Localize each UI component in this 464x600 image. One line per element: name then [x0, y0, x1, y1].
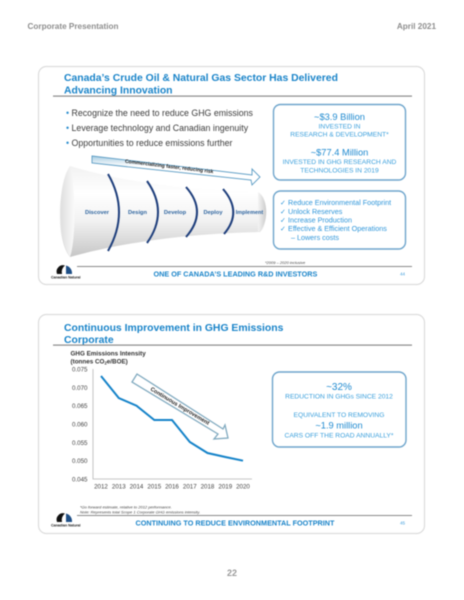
line chart: GHG emissions intensity: 2 — [104, 360, 107, 366]
callout: benefits checklist: ✓ Unlock Reserves — [280, 207, 343, 216]
arrow: continuous improvement — [132, 374, 228, 439]
funnel diagram: Design — [128, 210, 148, 216]
callout: investment figures: RESEARCH & DEVELOPMENT* — [290, 132, 389, 138]
panel: emissions slide — [38, 314, 424, 534]
page header: Corporate Presentation — [28, 22, 118, 31]
heading: emissions: Continuous Improvement in GHG Emissions — [64, 323, 284, 334]
line chart: GHG emissions intensity: 0.075 — [72, 366, 88, 374]
line chart: GHG emissions intensity: 2012 — [94, 484, 108, 490]
line chart: GHG emissions intensity — [70, 350, 252, 490]
bullet list: • Recognize the need to reduce GHG emissions — [66, 108, 254, 118]
bullet list — [66, 108, 254, 148]
callout: benefits checklist — [274, 191, 406, 249]
footnote: *2009 – 2020 inclusive — [265, 260, 306, 265]
funnel diagram: Discover — [85, 210, 110, 216]
line chart: GHG emissions intensity: 2014 — [130, 484, 144, 490]
logo: Canadian Natural — [51, 265, 81, 280]
logo: Canadian Natural: Canadian Natural — [51, 276, 81, 280]
page header — [28, 22, 436, 31]
line chart: GHG emissions intensity: (tonnes CO — [70, 358, 104, 366]
heading: innovation — [53, 73, 412, 97]
line chart: GHG emissions intensity: e/BOE) — [107, 358, 128, 366]
heading: emissions: Corporate — [64, 335, 114, 346]
callout: reduction figures — [272, 372, 406, 447]
callout: reduction figures: CARS OFF THE ROAD ANNUALLY* — [284, 432, 394, 440]
footer: emissions slide: 45 — [400, 520, 406, 526]
bullet list: • Opportunities to reduce emissions further — [66, 138, 232, 148]
panel: innovation slide — [38, 66, 424, 284]
page number: 22 — [227, 568, 237, 578]
heading: emissions — [53, 323, 412, 346]
heading: innovation: Canada’s Crude Oil & Natural Gas Sector Has Delivered — [64, 73, 338, 84]
footer: emissions slide — [77, 515, 412, 528]
footnotes: *Go forward estimate, relative to 2012 performance. — [80, 504, 172, 510]
funnel diagram: Develop — [164, 210, 187, 216]
logo: Canadian Natural: Canadian Natural — [51, 524, 81, 528]
line chart: GHG emissions intensity: 0.045 — [72, 476, 88, 484]
arrow: continuous improvement: Continuous Improvement — [149, 387, 210, 427]
line chart: GHG emissions intensity: 2018 — [201, 484, 215, 490]
funnel diagram: Implement — [236, 210, 263, 216]
callout: benefits checklist: ✓ Increase Production — [280, 216, 352, 224]
line chart: GHG emissions intensity: 0.065 — [72, 403, 88, 410]
line chart: GHG emissions intensity: GHG Emissions Intensity — [70, 350, 146, 358]
footnotes — [80, 504, 200, 514]
callout: investment figures: INVESTED IN GHG RESEARCH AND — [283, 159, 397, 166]
callout: benefits checklist: ✓ Reduce Environmental Footprint — [280, 198, 391, 207]
page header: April 2021 — [397, 22, 436, 31]
line chart: GHG emissions intensity: 2019 — [218, 484, 233, 490]
line chart: GHG emissions intensity: 2015 — [147, 484, 162, 490]
callout: investment figures: TECHNOLOGIES IN 2019 — [300, 168, 379, 174]
logo: Canadian Natural — [51, 513, 81, 528]
callout: investment figures — [274, 104, 406, 180]
line chart: GHG emissions intensity: 2020 — [236, 484, 250, 490]
footer: innovation slide — [77, 266, 412, 278]
callout: investment figures: ~$3.9 Billion — [314, 112, 365, 122]
line chart: GHG emissions intensity: 0.070 — [72, 385, 88, 392]
line chart: GHG emissions intensity: 2016 — [165, 484, 179, 490]
funnel diagram: Deploy — [204, 210, 223, 216]
callout: reduction figures: REDUCTION IN GHGs SINCE 2012 — [285, 394, 393, 400]
callout: reduction figures: ~32% — [326, 382, 352, 393]
line chart: GHG emissions intensity: 0.055 — [72, 440, 88, 447]
line chart: GHG emissions intensity: 2017 — [183, 484, 197, 490]
line chart: GHG emissions intensity: 0.050 — [72, 458, 88, 465]
line chart: GHG emissions intensity: 0.060 — [72, 422, 88, 428]
footer: innovation slide: ONE OF CANADA’S LEADING R&D INVESTORS — [154, 270, 317, 278]
footer: innovation slide: 44 — [400, 272, 406, 276]
arrow: commercializing faster: Commercializing faster, reducing risk — [125, 159, 214, 175]
footer: emissions slide: CONTINUING TO REDUCE ENVIRONMENTAL FOOTPRINT — [136, 518, 335, 528]
line chart: GHG emissions intensity: 2013 — [112, 484, 126, 490]
bullet list: • Leverage technology and Canadian ingenuity — [66, 123, 249, 133]
callout: reduction figures: ~1.9 million — [315, 420, 363, 430]
callout: reduction figures: EQUIVALENT TO REMOVING — [294, 412, 384, 419]
funnel diagram — [60, 166, 266, 257]
callout: benefits checklist: – Lowers costs — [291, 233, 339, 242]
heading: innovation: Advancing Innovation — [64, 86, 173, 96]
arrow: commercializing faster — [92, 156, 260, 185]
callout: benefits checklist: ✓ Effective & Efficient Operations — [280, 224, 387, 233]
callout: investment figures: INVESTED IN — [318, 124, 361, 130]
callout: investment figures: ~$77.4 Million — [311, 148, 368, 158]
footnotes: Note: Represents total Scope 1 Corporate GHG emissions intensity. — [80, 510, 200, 514]
